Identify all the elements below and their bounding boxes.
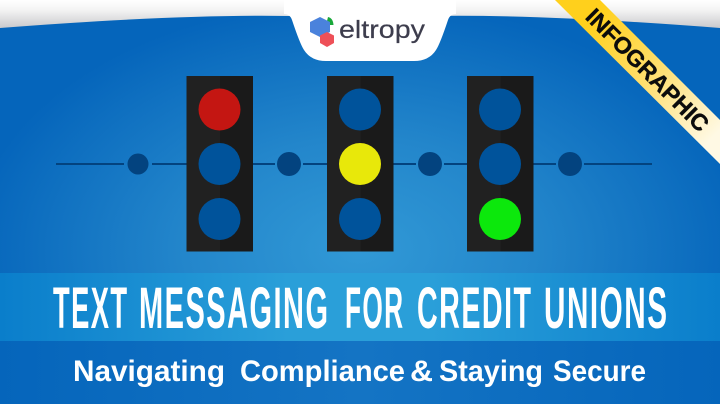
title: FOR: [345, 276, 404, 341]
traffic light: red: [186, 76, 253, 252]
logo tab: [284, 0, 456, 61]
title: CREDIT: [417, 276, 532, 341]
infographic ribbon: INFOGRAPHIC: [581, 3, 714, 137]
traffic light: green: [467, 76, 534, 252]
subtitle: [73, 355, 646, 388]
subtitle: Staying: [439, 355, 543, 388]
subtitle: Secure: [553, 355, 646, 388]
title: MESSAGING: [139, 276, 330, 341]
title: [53, 276, 668, 341]
subtitle: Compliance: [240, 355, 405, 388]
traffic light: yellow: [327, 76, 394, 252]
lower band background: [0, 341, 720, 404]
subtitle: &: [410, 355, 433, 388]
top curved header band: [0, 0, 720, 28]
title: TEXT: [53, 276, 128, 341]
infographic ribbon: [555, 0, 720, 164]
subtitle: Navigating: [73, 355, 225, 388]
timeline connector with dots: [56, 152, 652, 176]
logo wordmark: eltropy: [339, 16, 426, 44]
title band: [0, 273, 720, 341]
icon: eltropy hexagons: [310, 17, 334, 47]
